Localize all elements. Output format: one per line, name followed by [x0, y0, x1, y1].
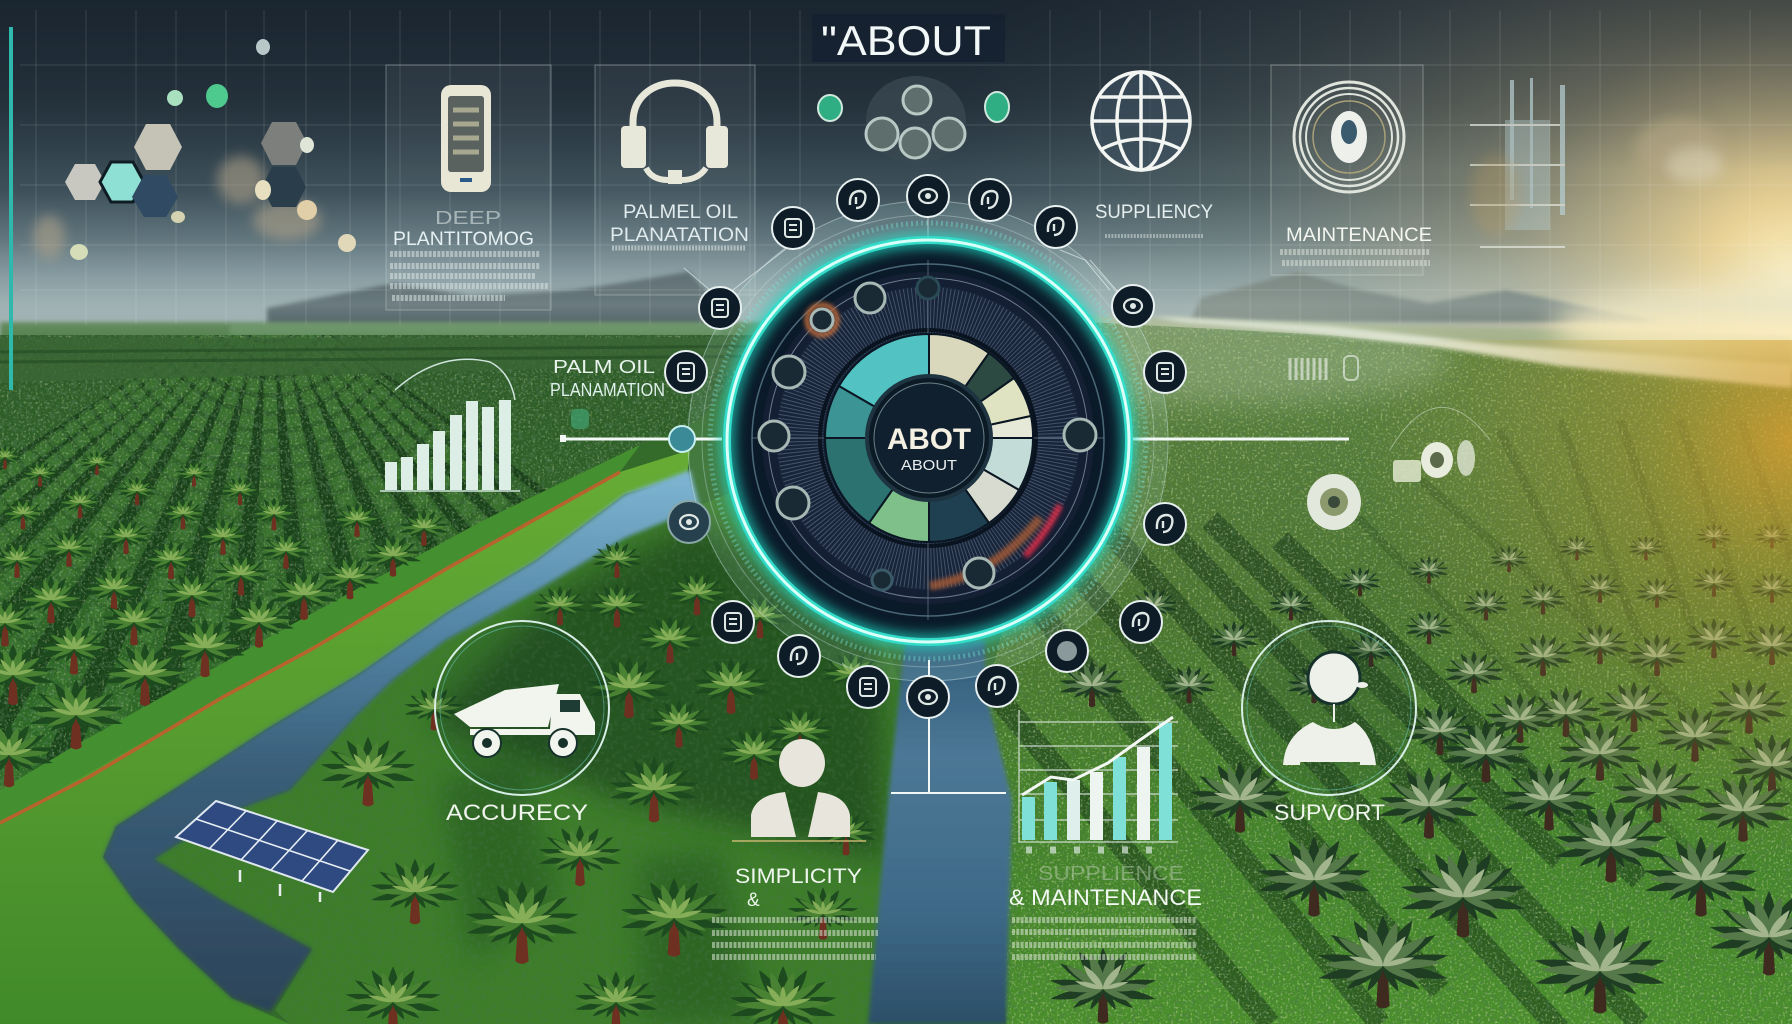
top centre medallion: [818, 76, 1009, 164]
label: & MAINTENANCE: [1009, 885, 1202, 910]
distant river on right: [1150, 316, 1792, 388]
icon: headset: [621, 83, 728, 184]
medallion rings: [866, 86, 965, 158]
icon: support agent with label: [1242, 621, 1416, 825]
chart grid: [1019, 710, 1178, 842]
hologram refinery towers: [1470, 78, 1565, 247]
palm trees: central island: [320, 541, 881, 1024]
bar chart: [385, 400, 511, 490]
smoke cloud on right: [1635, 118, 1725, 183]
connector lines: [560, 205, 1349, 793]
label: ACCURECY: [446, 800, 588, 825]
icon: truck with accuracy label: [435, 621, 609, 825]
pale ring icon: [1307, 474, 1361, 530]
green meadow and river bank: [0, 450, 690, 1024]
palm trees: left field: [0, 445, 449, 787]
chart: left bar chart with palm oil label: [380, 357, 665, 491]
sun glow on horizon: [1552, 283, 1792, 367]
small barcode hologram: [1290, 356, 1358, 380]
icon: person with simplicity label: [712, 739, 878, 957]
chart bars: [1022, 723, 1172, 840]
centre hub: [867, 376, 991, 500]
chart label: PLANAMATION: [550, 380, 665, 400]
inner ring mesh: [752, 260, 1104, 620]
panel: maintenance: [1271, 65, 1432, 275]
title: "ABOUT: [821, 17, 991, 64]
glass band around wheel: [688, 201, 1168, 681]
horizon haze: [0, 240, 1792, 340]
upper sky darkening: [0, 0, 1792, 170]
smoke blobs: [33, 156, 321, 259]
panel: digital planting: [386, 65, 551, 310]
left river: [103, 470, 700, 1012]
label: SIMPLICITY: [735, 865, 862, 888]
panel small text: [1280, 252, 1430, 263]
panel heading: SUPPLIENCY: [1095, 202, 1213, 223]
chart: supplier and maintenance growth chart: [1009, 710, 1202, 957]
distant plain: [0, 314, 1792, 400]
sun glow in sky: [0, 0, 1792, 400]
chart axis marks: [1026, 846, 1170, 854]
palm trees: right field: [1049, 523, 1792, 1024]
chart label: [550, 357, 665, 400]
ground base: [0, 370, 1792, 1024]
label: [1009, 863, 1202, 910]
panel heading: DEEP: [435, 208, 501, 228]
panel: supplier globe: [1092, 72, 1213, 236]
panel small text: [390, 254, 548, 298]
grass strip below palm rows: [0, 445, 640, 823]
central wheel dial: [727, 240, 1129, 642]
icon: person with simplicity label: &: [747, 890, 760, 911]
hexagons: [65, 122, 307, 217]
icon: concentric rings: [1294, 82, 1404, 192]
chart trend line: [1022, 717, 1173, 795]
central island field: [150, 480, 910, 1024]
distant mountains: [267, 272, 1660, 325]
panel heading: PLANATATION: [610, 225, 749, 246]
agent: [1283, 652, 1376, 765]
dots: [70, 39, 356, 260]
panel heading: [393, 208, 534, 250]
chart label: PALM OIL: [553, 357, 655, 377]
sky background: [0, 0, 1792, 345]
panel: palm oil plantation: [595, 65, 755, 295]
truck: [454, 684, 595, 757]
pie segments: [825, 334, 1033, 542]
central canal: [868, 640, 1012, 1024]
hexagon cluster: [33, 39, 356, 260]
dark disk: [730, 243, 1126, 639]
panel heading: MAINTENANCE: [1286, 225, 1432, 246]
icon: phone: [441, 85, 491, 192]
panel heading: [610, 202, 749, 246]
label: SUPVORT: [1274, 800, 1385, 825]
orange and red highlights: [807, 305, 1060, 586]
solar panel array: [176, 801, 368, 902]
small text: [712, 920, 878, 957]
orange dirt path: [0, 472, 620, 823]
panel small text: [1105, 234, 1204, 238]
right plantation field: [985, 315, 1792, 1024]
small machine hologram: [1390, 407, 1490, 482]
person: [751, 739, 850, 837]
panel heading: PLANTITOMOG: [393, 229, 534, 250]
icon: globe: [1092, 72, 1190, 170]
holographic grid: [20, 10, 1792, 325]
inner nodes: [759, 277, 1096, 590]
panel heading: PALMEL OIL: [623, 202, 738, 223]
sunlight wash over right field: [1300, 340, 1792, 880]
pale haze near wheel on right field: [1010, 315, 1450, 405]
medallion green nodes: [818, 92, 1009, 122]
outer glow ring: [727, 240, 1129, 642]
label: SUPPLIENCE: [1038, 863, 1184, 885]
small text: [1012, 920, 1197, 957]
left cyan accent line: [9, 27, 13, 390]
centre hub: ABOUT: [901, 457, 957, 474]
panel small text: [612, 246, 745, 250]
centre hub: ABOT: [887, 423, 971, 456]
orbit icon nodes: [665, 175, 1186, 718]
